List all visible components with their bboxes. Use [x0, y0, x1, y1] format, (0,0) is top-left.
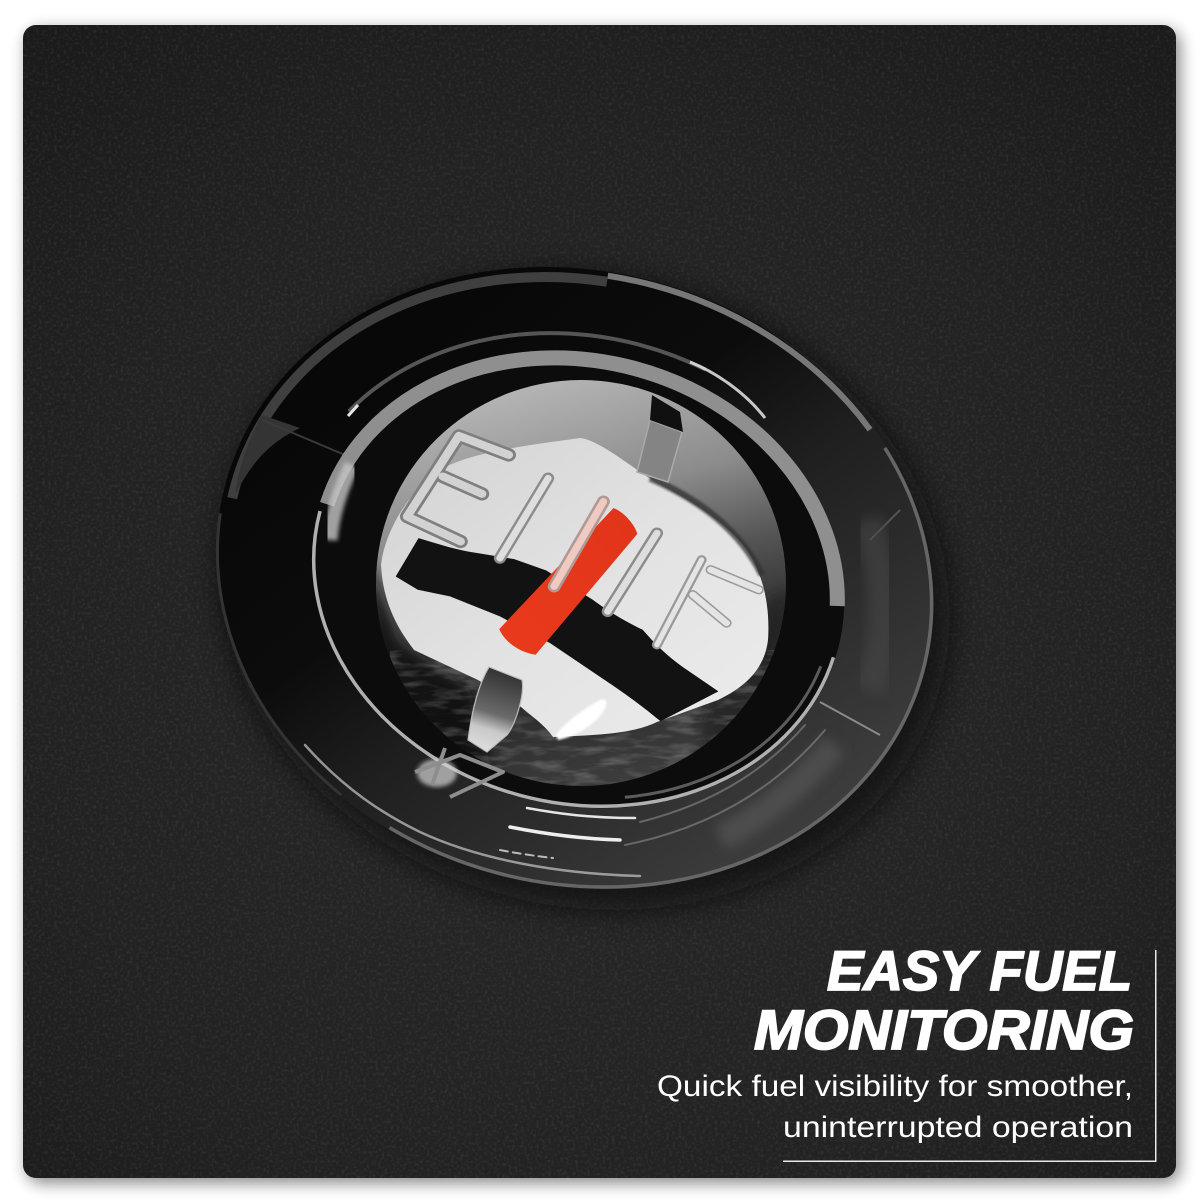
- moulded arrow mark: [415, 748, 503, 797]
- outer bezel body: [146, 188, 1004, 968]
- inner ring arcs: [262, 295, 894, 865]
- lower paper highlight: [556, 699, 606, 740]
- description text: uninterrupted operation: [783, 1111, 1133, 1144]
- wall fuzz: [390, 650, 790, 790]
- groove tip glint: [348, 405, 358, 416]
- inner ring body: [260, 293, 896, 867]
- left dark wall shade: [376, 564, 496, 766]
- description text: [657, 1070, 1133, 1144]
- black fuel band: [396, 538, 718, 721]
- frame line: vertical: [1155, 950, 1156, 1162]
- letter F, raised clear plastic: [657, 560, 759, 645]
- frame line: horizontal: [783, 1160, 1156, 1162]
- ring glints: [690, 362, 765, 418]
- seam lines: [262, 420, 345, 455]
- paper edge shadow: [650, 478, 762, 575]
- right tick: [608, 533, 657, 611]
- heading: [754, 939, 1134, 1061]
- right dark wall shade: [702, 593, 786, 743]
- red fuel needle: [499, 508, 637, 655]
- outer rim arcs: [147, 189, 1003, 967]
- left tick: [500, 478, 548, 558]
- fuel gauge bezel: [212, 264, 959, 920]
- upper clear tab: [637, 395, 683, 482]
- lower clear tab: [468, 667, 523, 752]
- tick marks: [500, 478, 657, 611]
- description text: Quick fuel visibility for smoother,: [657, 1070, 1133, 1103]
- heading: MONITORING: [754, 998, 1134, 1061]
- gauge window: white paper: [381, 438, 768, 737]
- inner tube wall: [370, 375, 790, 800]
- centre tick over needle: [554, 502, 603, 586]
- lower rim reflections: [305, 725, 825, 876]
- groove line: [233, 269, 923, 888]
- heading: EASY FUEL: [827, 939, 1132, 1002]
- letter E, raised clear plastic: [407, 436, 509, 541]
- left gray wedge: [235, 415, 300, 495]
- right band soft streaks: [866, 520, 884, 690]
